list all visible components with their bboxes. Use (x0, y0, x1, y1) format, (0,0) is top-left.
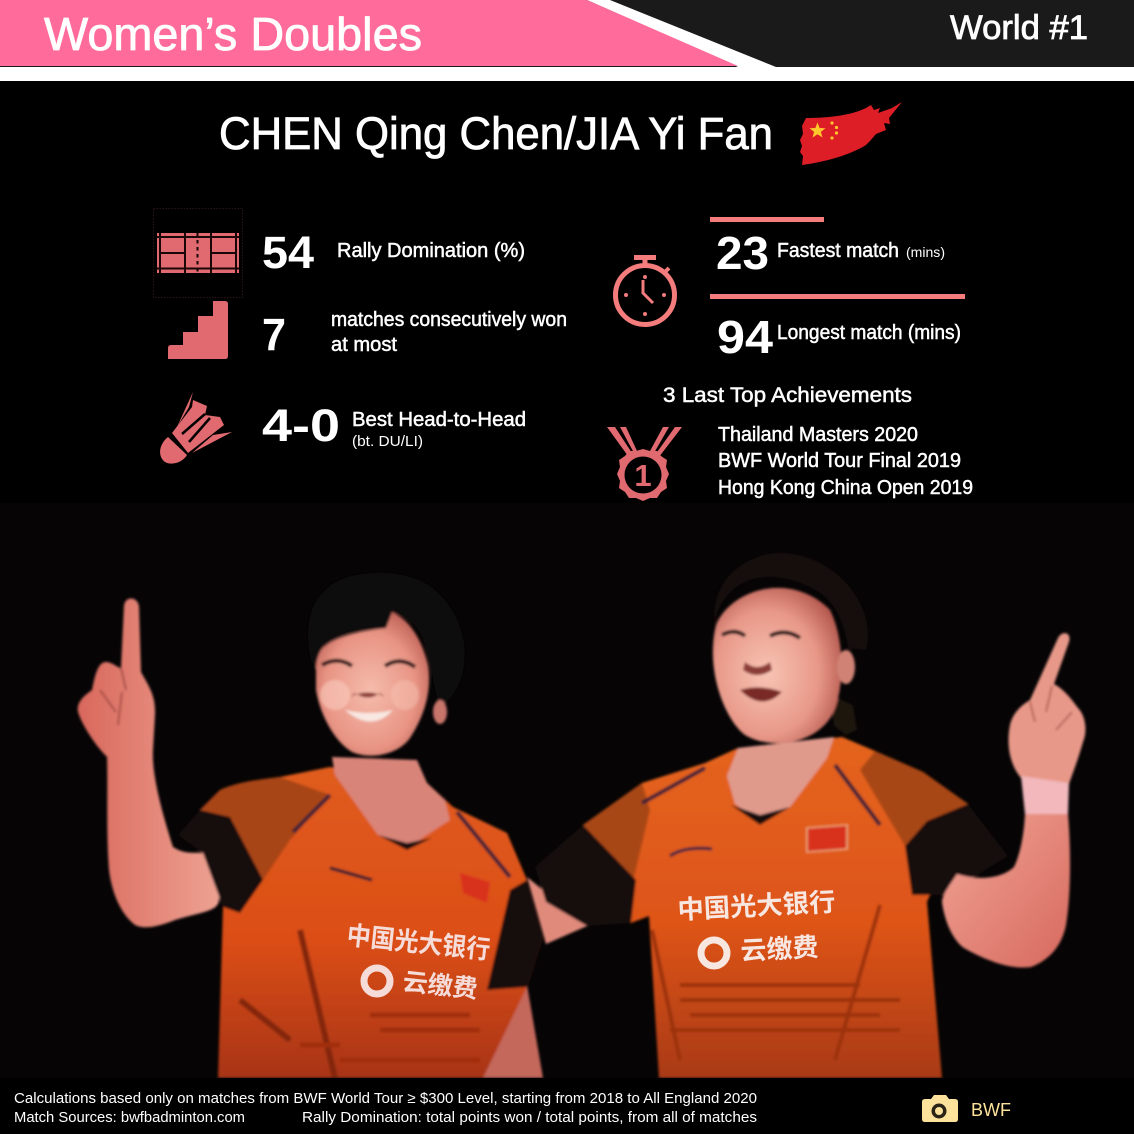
player: right (Jia Yi Fan): 中国光大银行 (676, 882, 836, 927)
player: left (Chen Qing Chen) (78, 573, 543, 1078)
icon: camera (922, 1095, 958, 1122)
header bar (0, 0, 1134, 81)
footnote: match sources: Match Sources: bwfbadminton.com (14, 1109, 245, 1126)
player: left (Chen Qing Chen): 中国光大银行 (345, 915, 492, 967)
list: achievements: BWF World Tour Final 2019 (718, 450, 961, 472)
heading: World #1: World #1 (950, 9, 1088, 47)
photo: two players pointing up (0, 503, 1134, 1078)
stat: rally domination label: Rally Domination (%) (337, 240, 525, 262)
player: right (Jia Yi Fan) (527, 553, 1085, 1078)
icon: first place medal (607, 427, 682, 501)
list: achievements: Thailand Masters 2020 (718, 424, 918, 446)
icon: badminton court (154, 208, 242, 298)
divider bar: fastest match (710, 217, 824, 222)
player: left (Chen Qing Chen): 云缴费 (401, 962, 480, 1006)
list: achievements (718, 424, 973, 499)
icon: shuttlecock (160, 392, 232, 464)
stat: consecutive wins label: at most (331, 334, 397, 356)
stat: fastest match label: Fastest match (777, 240, 899, 262)
stat: fastest match label: (mins) (906, 244, 945, 260)
stat: consecutive wins value: 7 (262, 309, 286, 360)
title: player names: CHEN Qing Chen/JIA Yi Fan (219, 108, 773, 159)
heading: Women's Doubles: Women’s Doubles (44, 8, 422, 60)
footer bar (0, 1078, 1134, 1134)
icon: stairs (168, 301, 228, 359)
stat: rally domination value: 54 (262, 227, 314, 278)
stat: consecutive wins label: matches consecutively won (331, 309, 567, 331)
divider bar: longest match (710, 294, 965, 299)
list: achievements: Hong Kong China Open 2019 (718, 477, 973, 499)
player: right (Jia Yi Fan): 云缴费 (739, 927, 819, 968)
stat: head-to-head value: 4-0 (262, 400, 340, 451)
stat: head-to-head label (352, 409, 526, 450)
icon: China flag brush stroke (800, 102, 902, 165)
photo credit: BWF (971, 1100, 1011, 1120)
stat: head-to-head label: (bt. DU/LI) (352, 433, 423, 450)
stat: fastest match value: 23 (716, 227, 769, 279)
stat: consecutive wins label (331, 309, 567, 356)
stat: longest match label: Longest match (mins) (777, 322, 961, 344)
icon: first place medal: 1 (634, 458, 652, 493)
footnote: calculations: Calculations based only on matches from BWF World Tour ≥ $300 Level, starting from 2018 to All England 2020 (14, 1090, 757, 1107)
footnote: rally domination definition: Rally Domination: total points won / total points, from all of matches (302, 1109, 757, 1126)
stat: head-to-head label: Best Head-to-Head (352, 409, 526, 431)
heading: achievements: 3 Last Top Achievements (663, 384, 912, 407)
stat: longest match value: 94 (717, 311, 773, 363)
icon: stopwatch (616, 258, 674, 324)
